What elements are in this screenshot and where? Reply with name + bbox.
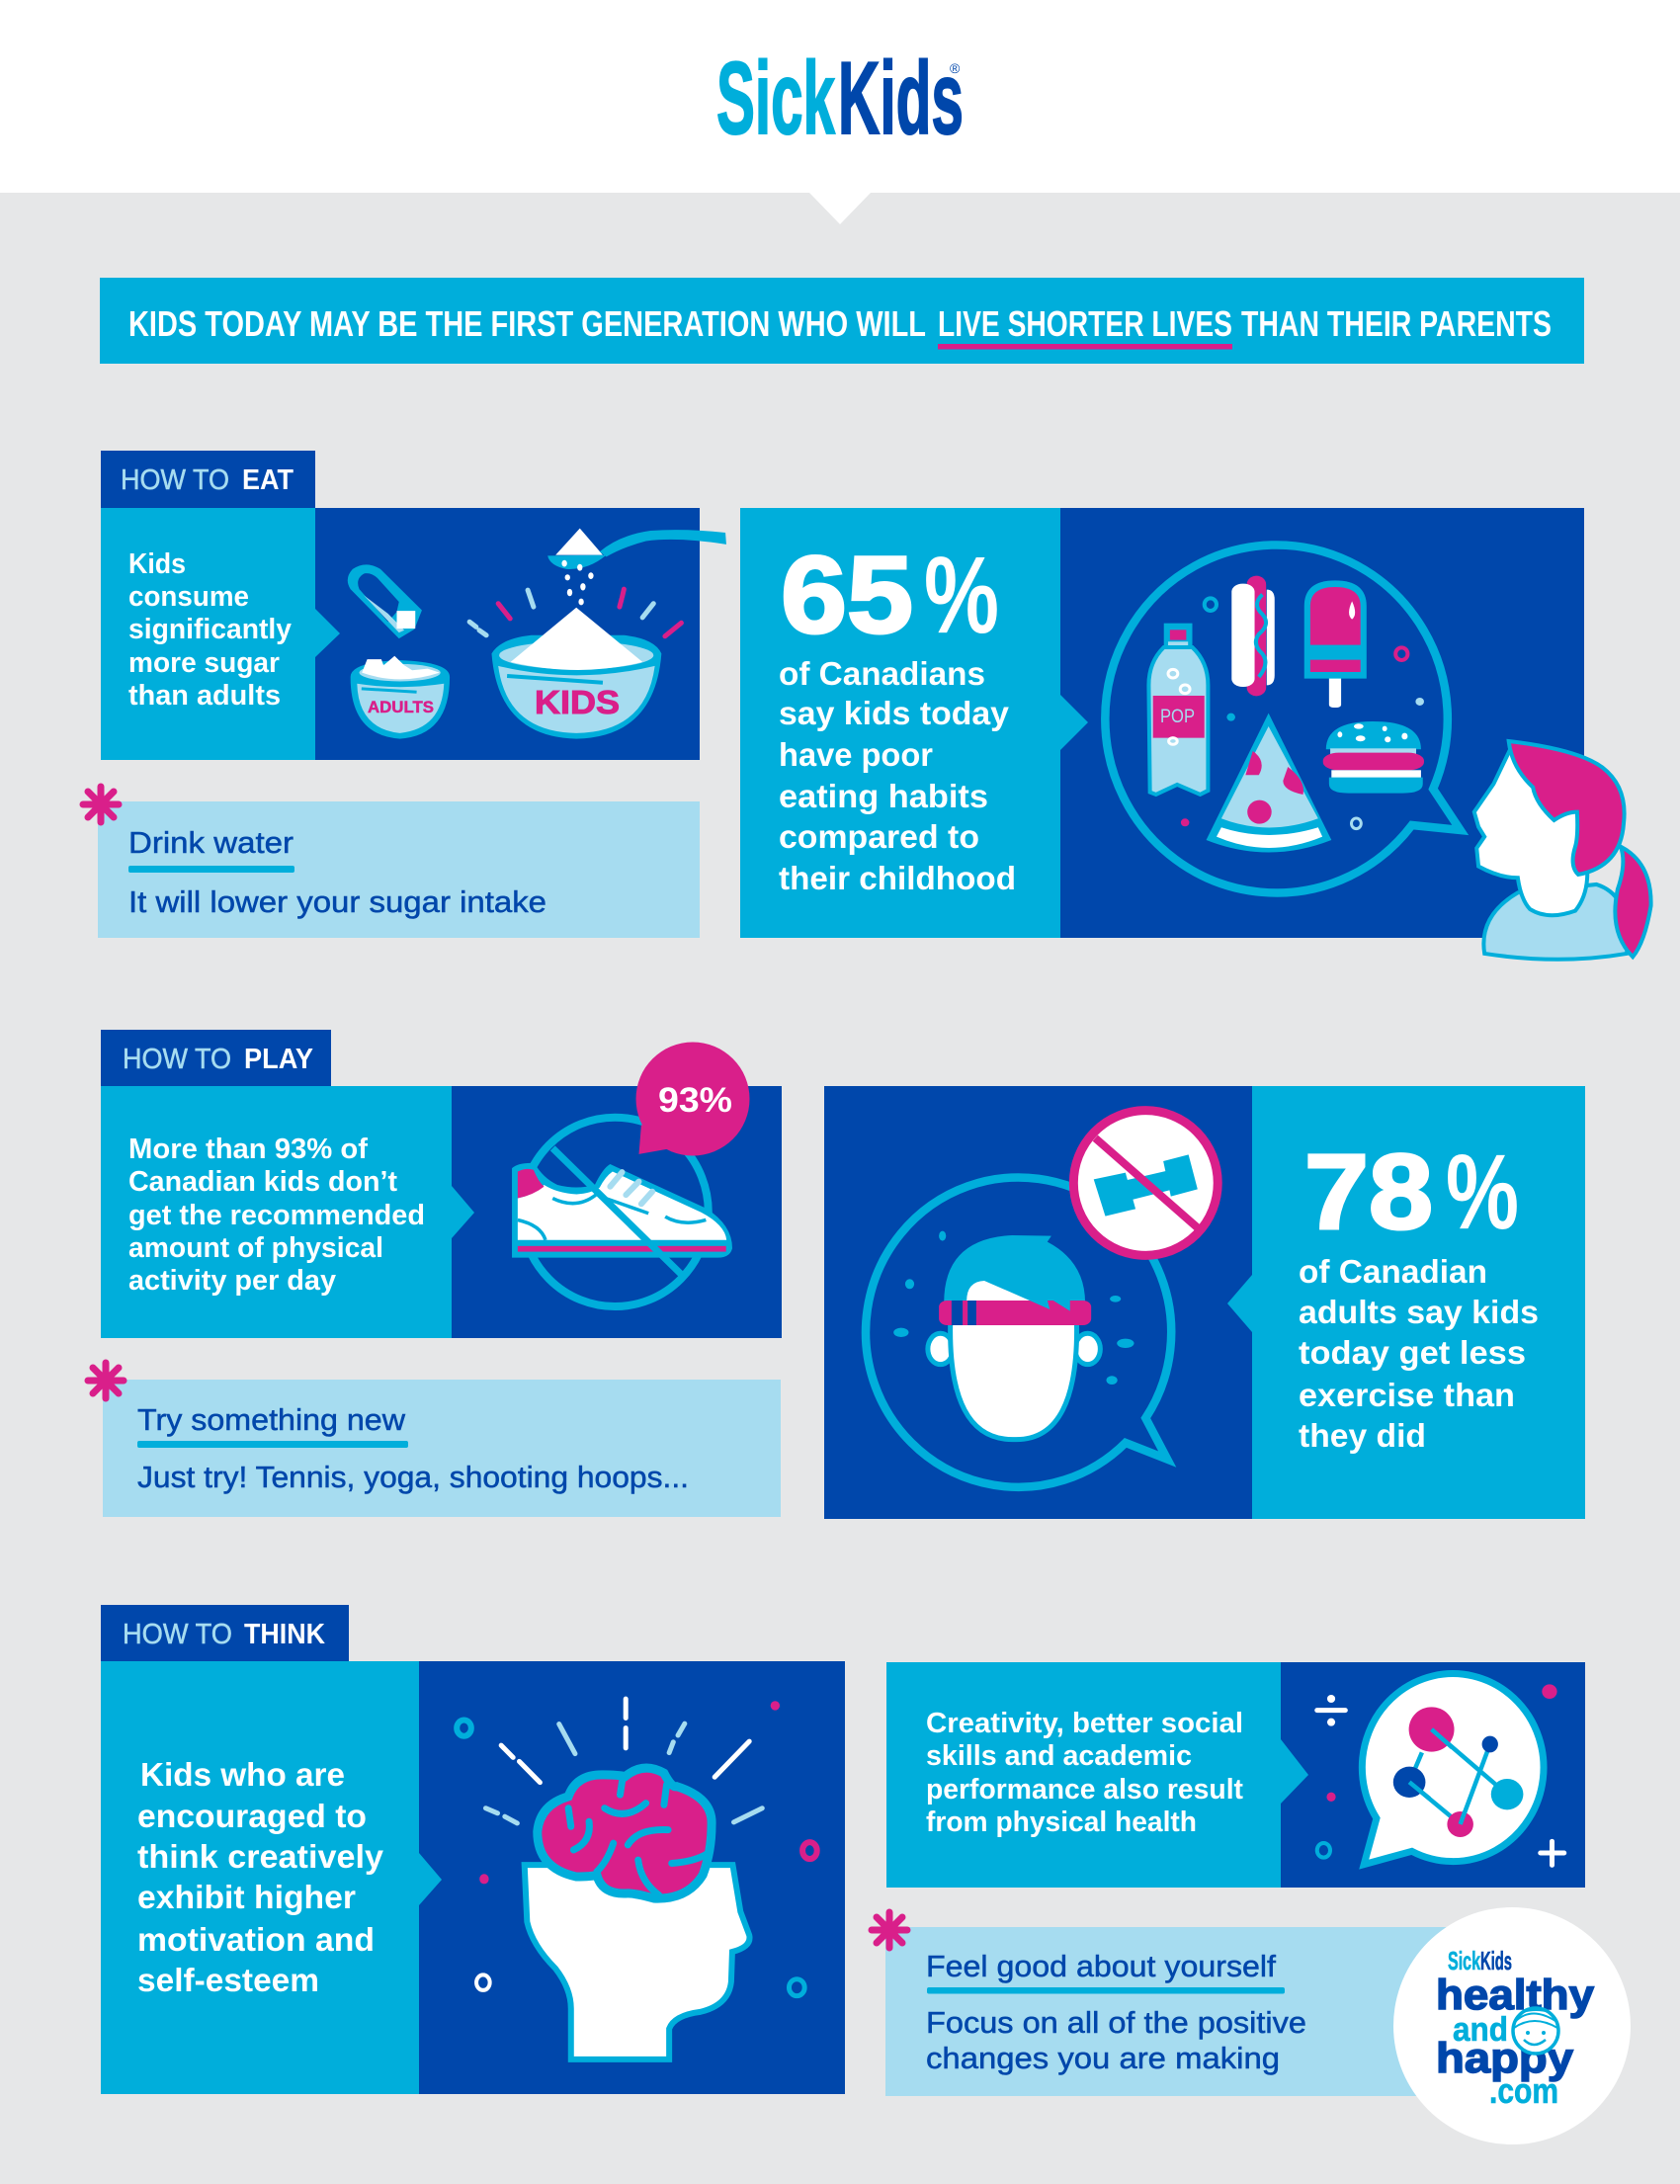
text: kids encouraged to think: self-esteem (137, 1962, 319, 1998)
icon: brain (538, 1768, 712, 1898)
number: 65% (781, 535, 999, 656)
logo: SickKids: Sick (716, 42, 835, 156)
number: 65%: % (924, 535, 999, 656)
text: canadians say: have poor (779, 736, 933, 773)
number: 65%: 65 (781, 535, 913, 656)
text: creativity result: from physical health (926, 1806, 1197, 1838)
text: kids encouraged to think: Kids who are (140, 1756, 345, 1793)
text: kids consume more sugar: Kids (128, 548, 186, 580)
text: creativity result (926, 1708, 1243, 1838)
logo: SickKids: Kids (838, 42, 964, 156)
text: more than 93 percent: More than 93% of (128, 1134, 368, 1165)
text: kids encouraged to think (137, 1756, 384, 1998)
text: more than 93 percent (128, 1134, 425, 1297)
illustration: girl in profile (1474, 741, 1651, 960)
text: more than 93 percent: amount of physical (128, 1232, 383, 1264)
headline banner (100, 278, 1584, 364)
heading: how to think (101, 1605, 349, 1662)
icon: asterisk (88, 1363, 124, 1398)
text: kids encouraged to think: motivation and (137, 1921, 375, 1958)
heading: how to eat: EAT (242, 464, 294, 496)
badge: healthy and happy logo: .com (1489, 2070, 1558, 2111)
icon: popsicle (1304, 580, 1367, 708)
section: how to eat (83, 451, 1651, 960)
tip: try something new: Try something new (137, 1402, 406, 1437)
heading: how to play: PLAY (244, 1044, 313, 1075)
text: kids consume more sugar: significantly (128, 614, 292, 645)
icon: crossed out sneaker (512, 1118, 732, 1306)
header band with logo (0, 0, 1680, 224)
heading: how to eat: HOW TO (121, 464, 229, 496)
icon: rays and dots (457, 1699, 817, 1996)
icon: kids bowl (491, 608, 661, 739)
tip: drink water (83, 787, 700, 938)
icon: hot dog (1231, 576, 1275, 696)
text: canadian adults say: today get less (1299, 1334, 1526, 1371)
panel: 78 percent statistic (824, 1086, 1585, 1519)
heading: how to play (101, 1030, 331, 1087)
text: canadians say: say kids today (779, 695, 1010, 731)
decorative food dots (1181, 598, 1424, 829)
text: canadian adults say: exercise than (1299, 1377, 1515, 1413)
text: kids consume more sugar: than adults (128, 680, 281, 712)
text: creativity result: skills and academic (926, 1740, 1192, 1772)
text: more than 93 percent: Canadian kids don’t (128, 1166, 397, 1198)
headline banner: LIVE SHORTER LIVES (938, 303, 1232, 344)
panel: think creatively (101, 1661, 845, 2094)
illustration: sweating head in speech bubble (866, 1177, 1171, 1487)
number: 78% (1304, 1132, 1519, 1251)
tip: drink water: It will lower your sugar intake (128, 884, 546, 919)
tip: try something new: Just try! Tennis, yoga, shooting hoops... (137, 1460, 689, 1494)
panel: sugar consumption (101, 508, 726, 760)
tip: try something new (88, 1363, 781, 1517)
icon: speech bubble with network (1362, 1674, 1544, 1865)
text: canadian adults say: adults say kids (1299, 1294, 1539, 1330)
text: canadian adults say (1299, 1253, 1539, 1454)
panel: 65 percent statistic: POP (1160, 707, 1195, 727)
text: canadian adults say: they did (1299, 1417, 1426, 1454)
icon: math symbols and dots (1317, 1684, 1564, 1865)
icon: tongs with sugar cube (348, 564, 422, 638)
icon: smiling face with bandage (1513, 2008, 1558, 2054)
text: kids consume more sugar: more sugar (128, 647, 280, 679)
text: canadians say: compared to (779, 818, 979, 855)
text: creativity result: performance also result (926, 1774, 1243, 1806)
callout: 93 percent (636, 1042, 749, 1156)
text: kids consume more sugar (128, 548, 292, 712)
panel: physical activity (101, 1042, 782, 1338)
number: 78%: % (1446, 1132, 1519, 1251)
section: how to play (88, 1030, 1585, 1519)
panel: sugar consumption: KIDS (535, 684, 620, 720)
badge: healthy and happy logo (1393, 1907, 1631, 2144)
section: how to think (101, 1605, 1631, 2144)
badge: healthy and happy logo: Kids (1480, 1946, 1512, 1975)
tip: feel good about yourself: changes you are making (926, 2041, 1280, 2075)
panel: sugar consumption: ADULTS (368, 698, 434, 716)
heading: how to think: HOW TO (123, 1619, 232, 1650)
icon: pop bottle (1148, 624, 1208, 795)
text: kids consume more sugar: consume (128, 581, 249, 613)
icon: spoon pouring sugar (469, 529, 726, 636)
text: kids encouraged to think: exhibit higher (137, 1879, 356, 1915)
text: canadians say (779, 655, 1016, 896)
icon: adults bowl (351, 656, 450, 739)
badge: healthy and happy logo: healthy (1436, 1972, 1594, 2019)
tip: drink water: Drink water (128, 825, 294, 860)
number: 78%: 78 (1304, 1132, 1433, 1251)
badge: healthy and happy logo: and (1453, 2011, 1508, 2049)
speech bubble tail (638, 1125, 682, 1154)
text: canadians say: of Canadians (779, 655, 985, 692)
headline banner: THAN THEIR PARENTS (1241, 303, 1552, 344)
text: kids encouraged to think: encouraged to (137, 1798, 367, 1834)
badge: healthy and happy logo: Sick (1448, 1946, 1480, 1975)
heading: how to play: HOW TO (123, 1044, 231, 1075)
logo: SickKids: ® (950, 60, 961, 76)
icon: head with headband (893, 1231, 1134, 1440)
text: canadians say: eating habits (779, 778, 988, 814)
headline banner: KIDS TODAY MAY BE THE FIRST GENERATION WHO WILL (128, 303, 926, 344)
tip: feel good about yourself (872, 1912, 1478, 2096)
panel: 65 percent statistic (740, 508, 1651, 960)
badge: healthy and happy logo: happy (1436, 2035, 1573, 2082)
callout: 93 percent: 93% (658, 1081, 732, 1120)
icon: no dumbbell sign (1073, 1111, 1218, 1255)
icon: asterisk (83, 787, 119, 822)
heading: how to think: THINK (244, 1619, 325, 1650)
text: canadian adults say: of Canadian (1299, 1253, 1487, 1290)
illustration: head with brain (457, 1699, 817, 2059)
heading: how to eat (101, 451, 315, 509)
tip: feel good about yourself: Focus on all of the positive (926, 2005, 1306, 2040)
icon: asterisk (872, 1912, 907, 1948)
text: more than 93 percent: activity per day (128, 1265, 336, 1297)
text: canadians say: their childhood (779, 860, 1016, 896)
illustration: speech bubble with junk food (1105, 545, 1651, 960)
icon: pizza slice (1207, 714, 1331, 852)
text: kids encouraged to think: think creatively (137, 1838, 384, 1875)
panel: creativity and academics (886, 1662, 1585, 1888)
text: more than 93 percent: get the recommended (128, 1200, 425, 1231)
text: creativity result: Creativity, better social (926, 1708, 1243, 1739)
tip: feel good about yourself: Feel good about yourself (926, 1949, 1276, 1983)
icon: burger (1323, 721, 1424, 794)
